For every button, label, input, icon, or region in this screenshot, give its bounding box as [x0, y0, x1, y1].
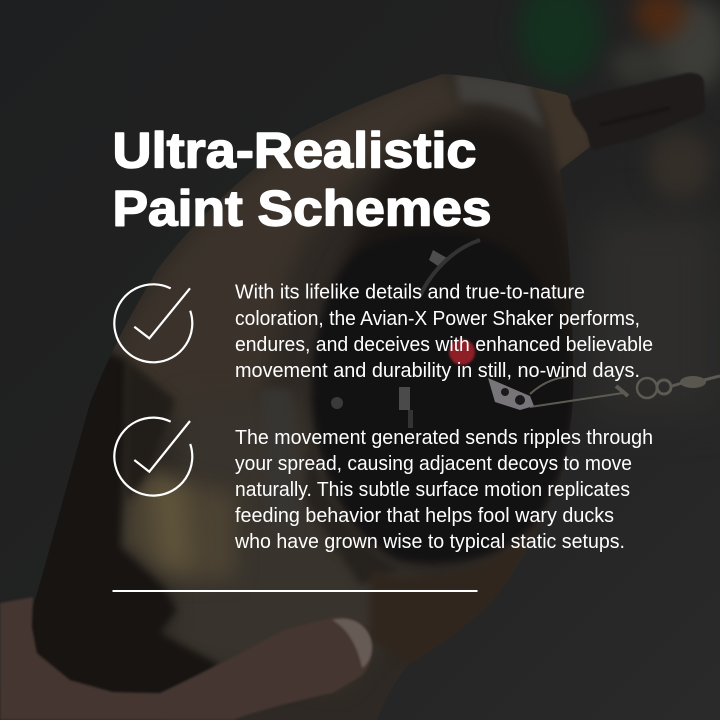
- text block: lifelike details: [235, 280, 653, 382]
- pale chest patch: [123, 470, 235, 580]
- text block: lifelike details: With its lifelike details and true-to-nature: [235, 280, 585, 304]
- dark wing: [32, 352, 218, 694]
- hand and thumb: [0, 597, 372, 720]
- text block: ripples: feeding behavior that helps fool wary ducks: [235, 504, 614, 527]
- icon: check mark in circle 2: [114, 418, 192, 496]
- red light: [449, 339, 475, 365]
- text block: ripples: naturally. This subtle surface motion replicates: [235, 478, 630, 501]
- text block: lifelike details: coloration, the Avian-X Power Shaker performs,: [235, 307, 640, 330]
- text block: ripples: who have grown wise to typical static setups.: [234, 530, 625, 553]
- text block: ripples: your spread, causing adjacent decoys to move: [235, 452, 632, 475]
- title: Ultra-Realistic: [112, 122, 477, 178]
- upper neck tan band: [120, 80, 456, 399]
- head crown grey band: [456, 75, 542, 126]
- bill: [570, 73, 705, 150]
- text block: lifelike details: movement and durability in still, no-wind days.: [235, 359, 640, 382]
- duck body: [32, 74, 590, 720]
- head brown patch: [536, 88, 590, 168]
- thumbnail: [332, 618, 372, 668]
- divider line: [112, 590, 478, 592]
- brown base below motor: [370, 578, 426, 644]
- swivel chain and pull tab: [488, 376, 720, 410]
- title: [112, 122, 491, 236]
- motor fittings: [331, 240, 480, 428]
- lower feathers: [181, 411, 366, 660]
- title: Paint Schemes: [112, 180, 491, 236]
- dark head interior: [344, 115, 574, 394]
- text block: lifelike details: endures, and deceives with enhanced believable: [235, 333, 653, 356]
- blurred green and orange decoys: [518, 0, 720, 199]
- icon: check mark in circle 1: [114, 284, 192, 362]
- shaker motor disc: [312, 232, 573, 564]
- text block: ripples: [234, 426, 653, 553]
- text block: ripples: The movement generated sends ripples through: [235, 426, 653, 449]
